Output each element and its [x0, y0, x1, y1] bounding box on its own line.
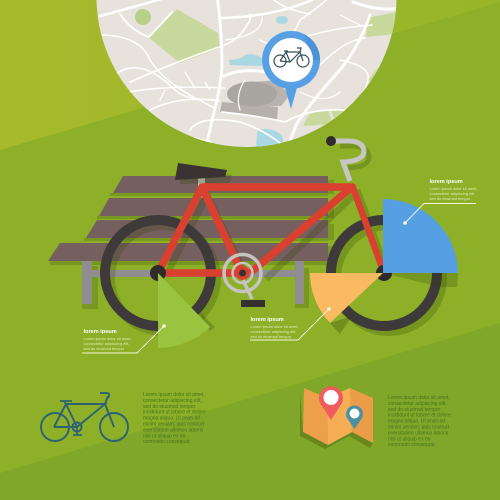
icon: red pin	[319, 386, 343, 420]
text: bike description: minim veniam, quis nostrud	[143, 422, 204, 428]
callout text: sed do eiusmod tempor	[430, 196, 471, 201]
map parks	[135, 9, 396, 126]
icon: small bike	[274, 48, 309, 67]
text: map description: nisi ut aliquip ex ea	[388, 436, 431, 442]
callout: orange	[250, 307, 331, 340]
text: bike description: magna aliqua. Ut enim ad	[143, 416, 200, 422]
pie: orange	[310, 273, 383, 334]
icon: teal pin	[346, 406, 363, 429]
wheels	[105, 220, 437, 326]
map pin	[262, 31, 320, 109]
callout heading: lorem ipsum	[250, 317, 284, 323]
text: map description: exercitation ullamco laboris	[388, 430, 449, 436]
callout leader	[403, 204, 476, 225]
text: map description: magna aliqua. Ut enim ad	[388, 419, 445, 425]
text: bike description: consectetur adipiscing elit,	[143, 398, 202, 404]
left hub	[150, 265, 166, 281]
callout: green	[82, 324, 166, 353]
callout leader	[250, 307, 331, 340]
callout heading: lorem ipsum	[430, 179, 463, 185]
text: bike description: commodo consequat.	[143, 439, 191, 445]
callout text: consectetur adipiscing elit,	[430, 191, 475, 196]
icon: blue bike	[41, 393, 128, 441]
saddle	[175, 163, 232, 187]
text: map description: incididunt ut labore et dolore	[388, 413, 451, 419]
callout heading: lorem ipsum	[84, 329, 117, 335]
text: map description: Lorem ipsum dolor sit amet,	[388, 395, 450, 401]
map streets	[100, 0, 400, 147]
bench planks	[48, 176, 328, 261]
map shadow areas	[220, 80, 290, 120]
callout text: sed do eiusmod tempor	[84, 346, 125, 351]
text: map description: minim veniam, quis nostrud	[388, 424, 449, 430]
bicycle	[105, 136, 442, 331]
callout text: Lorem ipsum dolor sit amet,	[250, 324, 299, 329]
handlebar	[326, 136, 364, 181]
map circle	[96, 0, 396, 147]
callout text: Lorem ipsum dolor sit amet,	[430, 186, 478, 191]
text: map description: sed do eiusmod tempor	[388, 407, 441, 413]
icon: folded map	[300, 386, 373, 449]
pie: blue	[383, 199, 458, 287]
map water	[229, 16, 288, 150]
text: bike description: exercitation ullamco laboris	[143, 427, 204, 433]
text: bike description: sed do eiusmod tempor	[143, 404, 196, 410]
text: bike description: incididunt ut labore et dolore	[143, 410, 206, 416]
text: bike description: nisi ut aliquip ex ea	[143, 433, 186, 439]
text: map description: commodo consequat.	[388, 442, 436, 448]
crank	[224, 254, 265, 307]
bicycle shadow	[110, 146, 442, 331]
bench legs	[82, 261, 304, 304]
callout text: consectetur adipiscing elit,	[250, 329, 296, 334]
callout text: consectetur adipiscing elit,	[84, 341, 129, 346]
frame	[158, 185, 384, 273]
callout leader	[82, 324, 166, 353]
pie: green	[158, 273, 215, 348]
right hub	[376, 265, 392, 281]
text: map description: consectetur adipiscing elit,	[388, 401, 447, 407]
text: bike description: Lorem ipsum dolor sit amet,	[143, 392, 205, 398]
bench	[48, 176, 334, 309]
bench shadow	[50, 180, 334, 309]
callout text: Lorem ipsum dolor sit amet,	[84, 336, 132, 341]
callout: blue	[403, 179, 478, 225]
callout text: sed do eiusmod tempor	[250, 334, 292, 339]
